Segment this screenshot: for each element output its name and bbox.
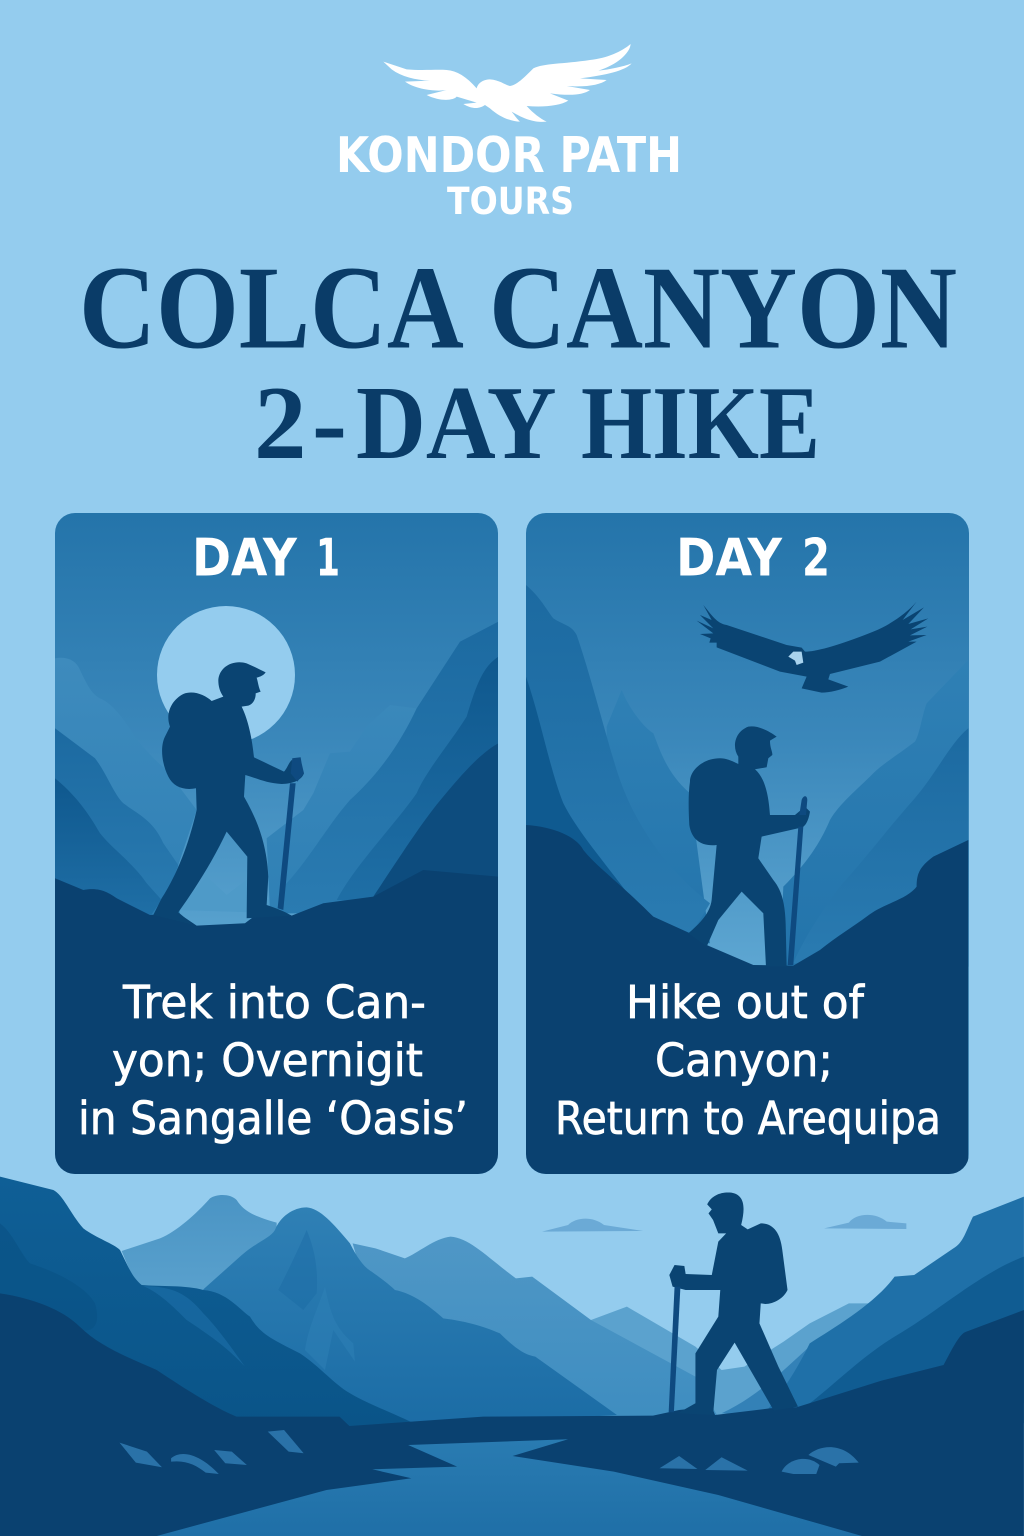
day 2 heading: 2 (802, 528, 830, 588)
day 1 description: yon; Overnigit (112, 1034, 423, 1087)
day 1 scene (55, 513, 498, 1177)
panel: day 2 (526, 513, 969, 1177)
brand name: KONDOR PATH (336, 127, 682, 184)
title line 1: COLCA (79, 242, 464, 374)
day 1 description: in Sangalle ‘Oasis’ (78, 1092, 468, 1145)
icon: hiker foreground (669, 1192, 798, 1415)
icon: condor emblem (383, 44, 632, 122)
mountains: day 1 (55, 622, 498, 1177)
right ridge (767, 1197, 1024, 1423)
river (144, 1433, 875, 1536)
icon: condor day 2 (697, 602, 928, 693)
rocks (119, 1430, 859, 1474)
day 2 heading: DAY (676, 528, 783, 588)
day 1 heading: 1 (316, 528, 340, 588)
title line 2: 2- (254, 364, 347, 481)
brand subtitle: TOURS (447, 180, 574, 223)
day 1 heading: DAY (192, 528, 298, 588)
bottom landscape (0, 1177, 1024, 1536)
day 2 description: Canyon; (655, 1034, 833, 1087)
icon: hiker day 2 (688, 726, 810, 967)
foreground ground (0, 1293, 1024, 1536)
day 1 description (78, 976, 468, 1145)
title (79, 242, 957, 481)
day 1 description: Trek into Can- (122, 976, 426, 1029)
day 2 description: Hike out of (626, 976, 865, 1029)
icon: hiker day 1 (153, 662, 304, 925)
panel: day 1 (55, 513, 498, 1177)
logo: Kondor Path Tours (336, 44, 682, 223)
icon: clouds (542, 1215, 906, 1232)
mountains: day 2 (526, 585, 968, 1177)
title line 2: DAY (356, 364, 555, 481)
title line 1: CANYON (489, 242, 957, 374)
day 2 scene (526, 513, 969, 1177)
icon: moon (157, 606, 295, 744)
day 2 description: Return to Arequipa (555, 1092, 941, 1145)
day 2 description (555, 976, 941, 1145)
right ridge, river and foreground (0, 1192, 1024, 1536)
far mountains right (353, 1237, 878, 1423)
title line 2: HIKE (581, 364, 820, 481)
central peaks and left ridge (0, 1177, 617, 1428)
